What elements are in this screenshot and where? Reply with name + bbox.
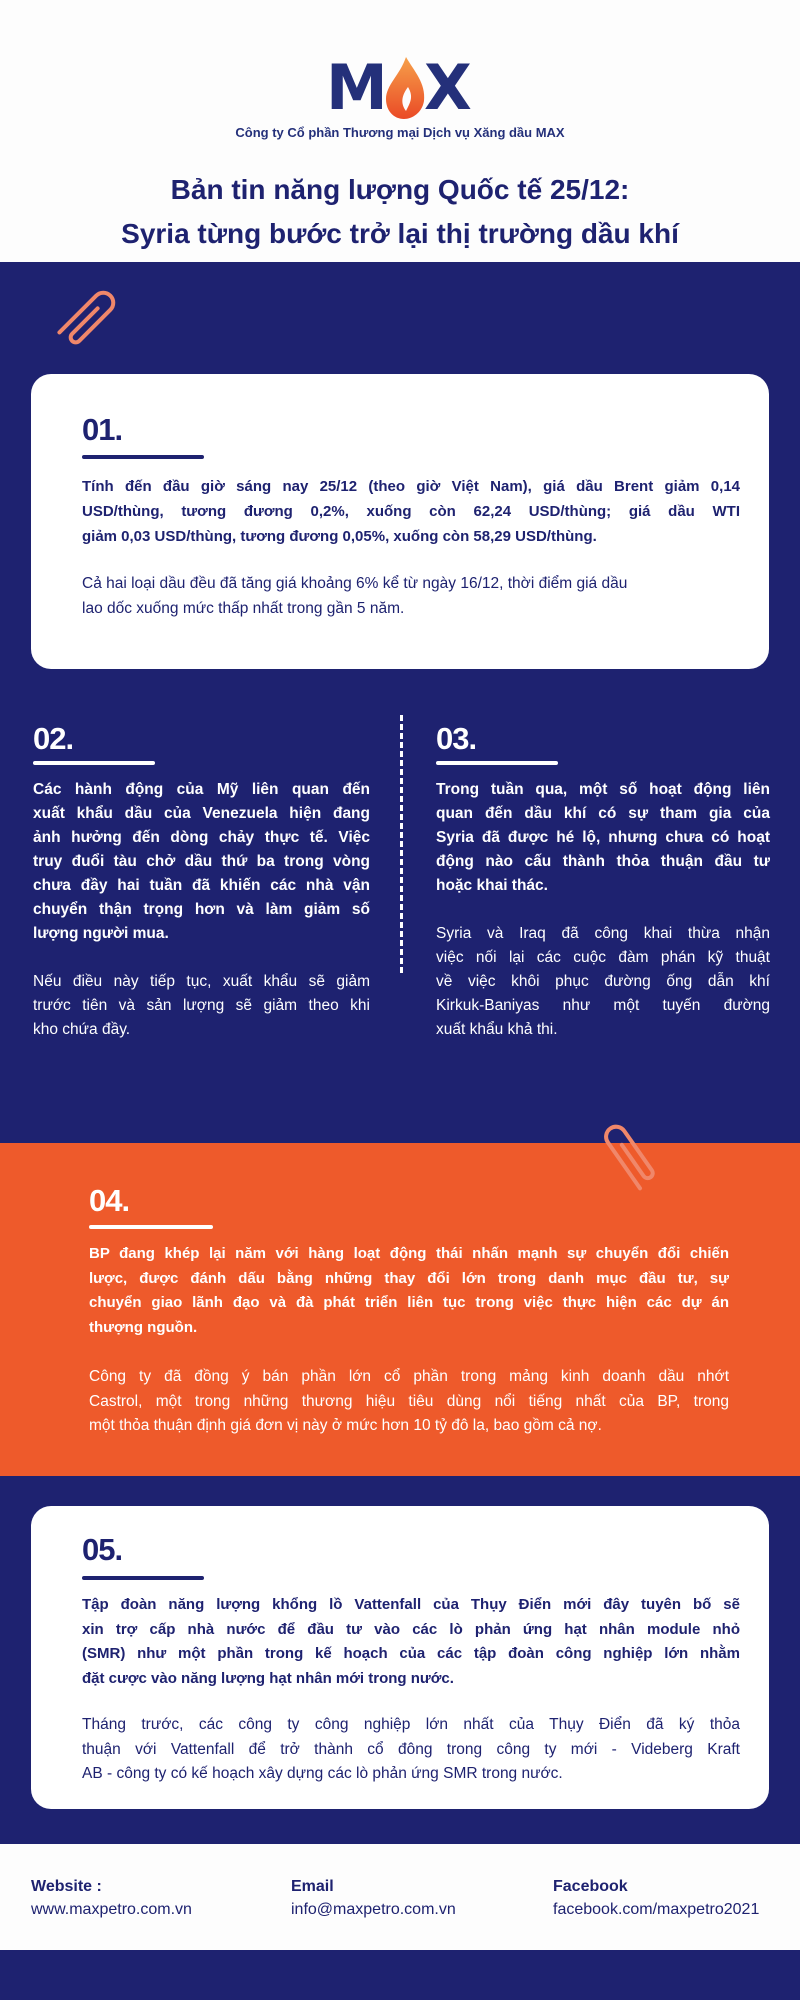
text block 02 bold: xuất khẩu dầu của Venezuela hiện đang <box>33 805 370 822</box>
panel: 01 <box>31 374 769 669</box>
text block 05 bold: xin trợ cấp nhà nước để đầu tư vào các lò phản ứng hạt nhân module nhỏ <box>82 1620 740 1638</box>
text block 02 regular: kho chứa đầy. <box>33 1021 130 1038</box>
footer: website: Website : <box>31 1878 102 1895</box>
panel: 03: 03. <box>436 721 476 756</box>
text block 03 bold: động nào cấu thành thỏa thuận đầu tư <box>436 853 770 870</box>
company name: Công ty Cổ phần Thương mại Dịch vụ Xăng dầu MAX <box>235 125 565 140</box>
text block 05 bold: đặt cược vào năng lượng hạt nhân mới trong nước. <box>82 1670 454 1686</box>
footer: facebook: facebook.com/maxpetro2021 <box>553 1901 759 1918</box>
logo: M <box>326 51 386 124</box>
header background <box>0 0 800 262</box>
text block 01 bold: Tính đến đầu giờ sáng nay 25/12 (theo giờ Việt Nam), giá dầu Brent giảm 0,14 <box>82 478 740 495</box>
text block 02 bold <box>33 781 370 942</box>
text block 02 bold: chưa đầy hai tuần đã khiến các nhà vận <box>33 877 370 894</box>
text block 02 bold: chuyển thận trọng hơn và làm giảm số <box>33 901 370 918</box>
panel: 05 <box>31 1506 769 1809</box>
text block 03 bold: quan đến dầu khí có sự tham gia của <box>436 805 770 822</box>
heading 01: 01. <box>82 412 122 447</box>
text block 01 bold: giảm 0,03 USD/thùng, tương đương 0,05%, xuống còn 58,29 USD/thùng. <box>82 528 597 545</box>
text block 03 regular: xuất khẩu khả thi. <box>436 1021 558 1038</box>
text block 04 bold: thượng nguồn. <box>89 1318 197 1336</box>
text block 02 bold: ảnh hưởng đến dòng chảy thực tế. Việc <box>33 829 370 846</box>
text block 05 bold: Tập đoàn năng lượng khổng lồ Vattenfall của Thụy Điển mới đây tuyên bố sẽ <box>82 1596 740 1613</box>
icon: paperclip 2 <box>604 1124 655 1190</box>
text block 01 bold <box>82 478 740 545</box>
text block 02 bold: lượng người mua. <box>33 925 169 942</box>
text block 04 regular: một thỏa thuận định giá đơn vị này ở mức hơn 10 tỷ đô la, bao gồm cả nợ. <box>89 1417 602 1434</box>
text block 05 bold: (SMR) như một phần trong kế hoạch của các tập đoàn công nghiệp lớn nhằm <box>82 1645 740 1662</box>
panel: 02: 02. <box>33 721 73 756</box>
title <box>121 174 680 249</box>
text block 03 regular: việc nối lại các cuộc đàm phán kỹ thuật <box>436 949 770 966</box>
title: Syria từng bước trở lại thị trường dầu khí <box>121 218 679 249</box>
text block 02 bold: truy đuổi tàu chở dầu thứ ba trong vòng <box>33 853 370 870</box>
logo <box>326 51 472 124</box>
footer: website: www.maxpetro.com.vn <box>31 1901 192 1918</box>
text block 04 bold <box>89 1245 729 1336</box>
title: Bản tin năng lượng Quốc tế 25/12: <box>171 174 629 205</box>
text block 03 regular <box>436 925 770 1038</box>
text block 03 regular: Syria và Iraq đã công khai thừa nhận <box>436 925 770 942</box>
text block 01 regular: Cả hai loại dầu đều đã tăng giá khoảng 6% kể từ ngày 16/12, thời điểm giá dầu <box>82 575 627 592</box>
footer: email <box>291 1878 456 1918</box>
text block 03 regular: về việc khôi phục đường ống dẫn khí <box>436 973 770 990</box>
text block 02 regular: trước tiên và sản lượng sẽ giảm theo khi <box>33 997 370 1014</box>
text block 04 bold: lược, được đánh dấu bằng những thay đổi lớn trong danh mục đầu tư, sự <box>89 1270 729 1286</box>
text block 01 regular: lao dốc xuống mức thấp nhất trong gần 5 năm. <box>82 600 404 617</box>
text block 03 bold <box>436 781 770 894</box>
text block 04 regular <box>89 1368 729 1434</box>
text block 02 regular <box>33 973 370 1038</box>
text block 05 bold <box>82 1596 740 1686</box>
footer: email: info@maxpetro.com.vn <box>291 1901 456 1918</box>
text block 05 regular: thuận với Vattenfall để trở thành cổ đông trong công ty mới - Videberg Kraft <box>82 1740 740 1758</box>
text block 05 regular <box>82 1716 740 1782</box>
text block 03 regular: Kirkuk-Baniyas như một tuyến đường <box>436 997 770 1014</box>
footer: website <box>31 1878 192 1918</box>
logo: X <box>424 51 472 124</box>
text block 04 bold: chuyển giao lãnh đạo và đà phát triển liên tục trong việc thực hiện các dự án <box>89 1294 729 1311</box>
footer: facebook: Facebook <box>553 1878 628 1895</box>
text block 05 regular: Tháng trước, các công ty công nghiệp lớn nhất của Thụy Điển đã ký thỏa <box>82 1716 740 1733</box>
text block 04 regular: Công ty đã đồng ý bán phần lớn cổ phần trong mảng kinh doanh dầu nhớt <box>89 1368 729 1385</box>
footer: facebook <box>553 1878 759 1918</box>
text block 01 regular <box>82 575 627 617</box>
text block 04 regular: Castrol, một trong những thương hiệu tiêu dùng nổi tiếng nhất của BP, trong <box>89 1392 729 1410</box>
footer: email: Email <box>291 1878 334 1895</box>
text block 02 regular: Nếu điều này tiếp tục, xuất khẩu sẽ giảm <box>33 973 370 990</box>
text block 03 bold: Trong tuần qua, một số hoạt động liên <box>436 781 770 798</box>
footer <box>0 1844 800 1950</box>
text block 03 bold: hoặc khai thác. <box>436 877 548 894</box>
text block 03 bold: Syria đã được hé lộ, nhưng chưa có hoạt <box>436 829 770 846</box>
panel: 04: 04. <box>89 1183 129 1218</box>
panel: 05: 05. <box>82 1532 122 1567</box>
text block 05 regular: AB - công ty có kế hoạch xây dựng các lò phản ứng SMR trong nước. <box>82 1765 563 1782</box>
text block 02 bold: Các hành động của Mỹ liên quan đến <box>33 781 370 798</box>
icon: paperclip 1 <box>57 290 116 344</box>
panel: 04 <box>0 1143 800 1476</box>
panel: 02 <box>33 721 370 1038</box>
text block 01 bold: USD/thùng, tương đương 0,2%, xuống còn 62,24 USD/thùng; giá dầu WTI <box>82 503 740 520</box>
panel: 03 <box>436 721 770 1038</box>
text block 04 bold: BP đang khép lại năm với hàng loạt động thái nhấn mạnh sự chuyển đổi chiến <box>89 1245 729 1262</box>
